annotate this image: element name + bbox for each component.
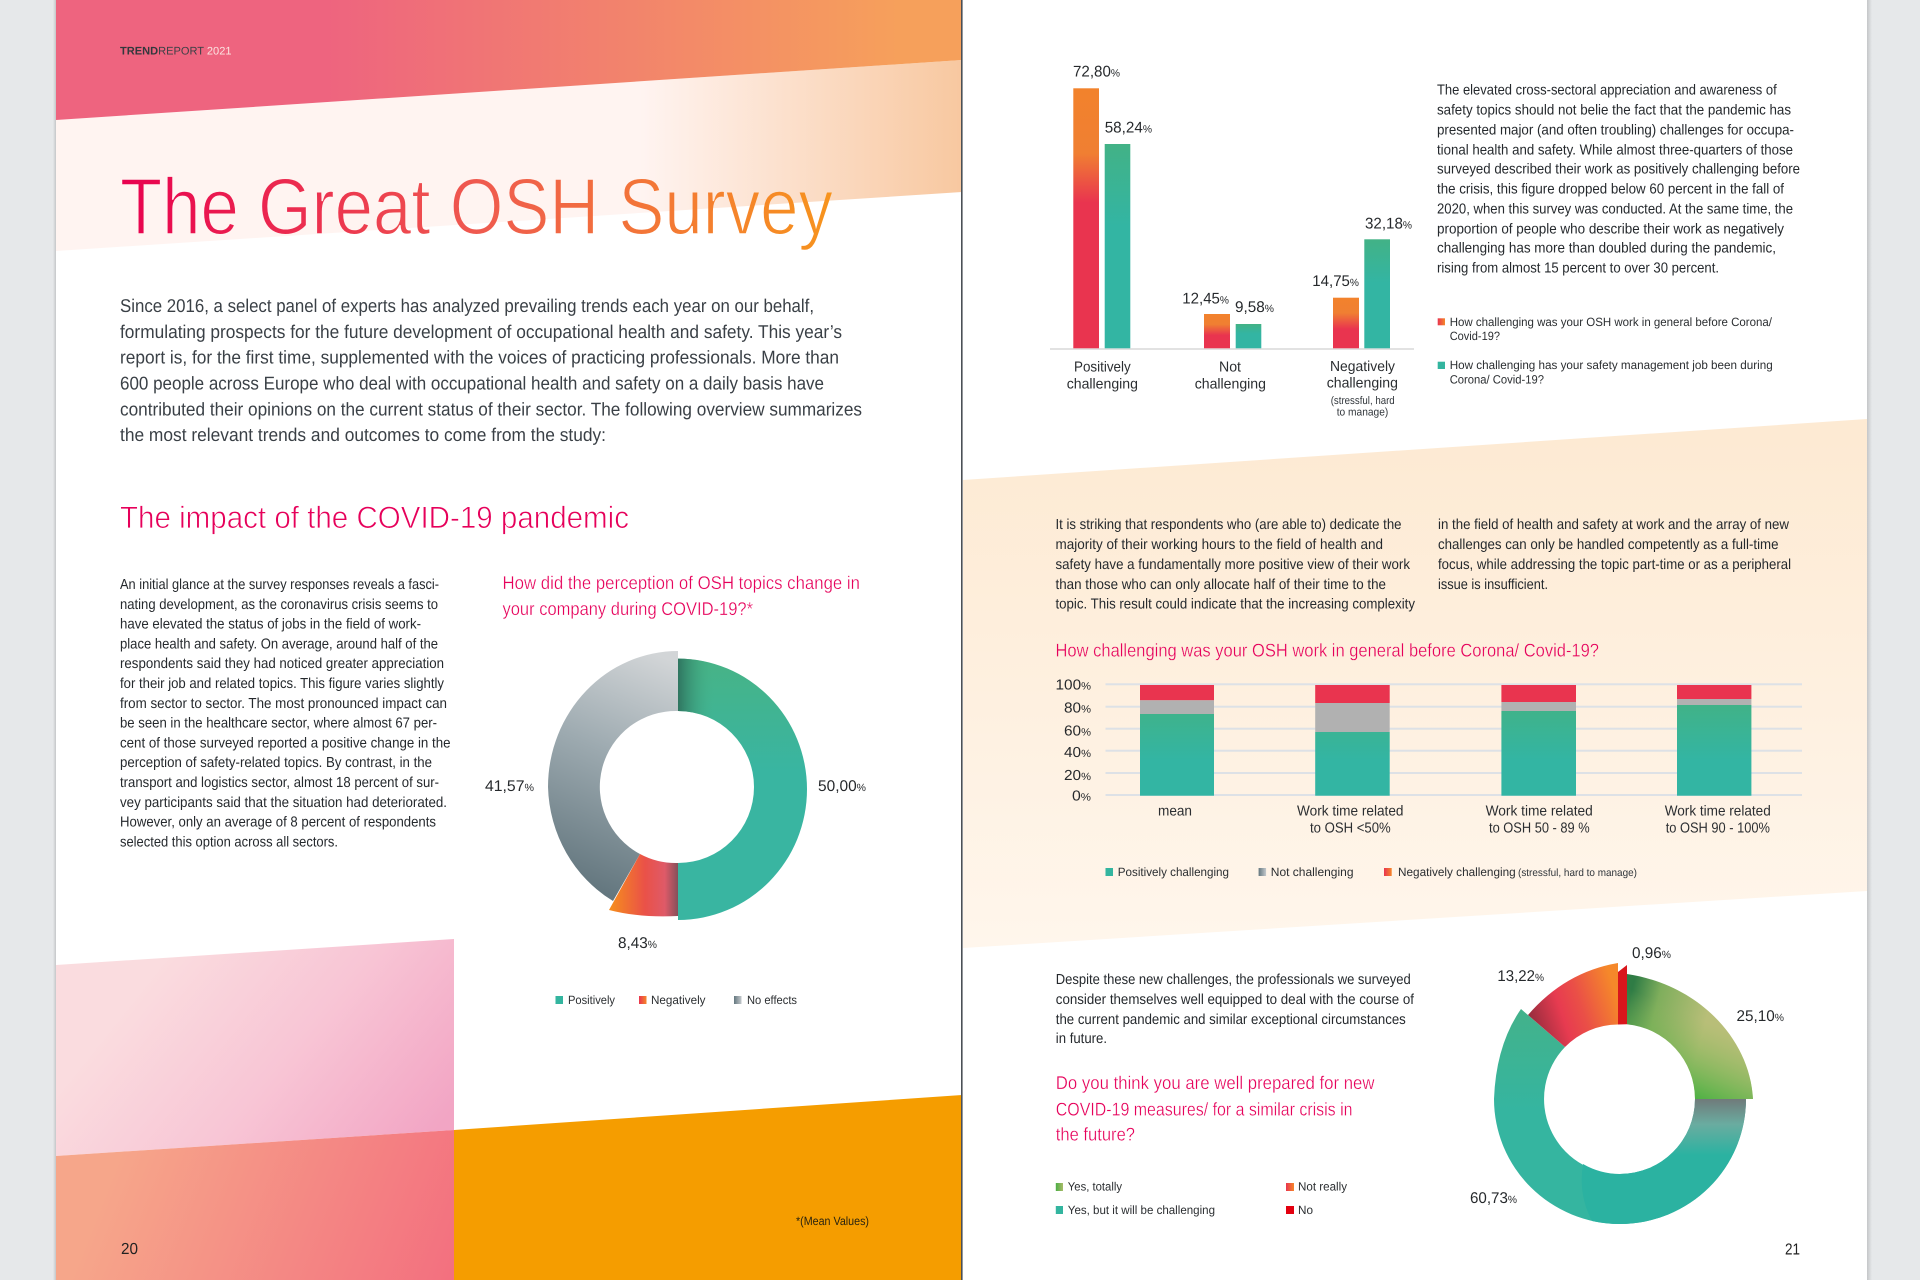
body text column: cent of those surveyed reported a positive change in the [120,735,450,751]
bar values: 72,80% [1073,64,1120,81]
category labels: challenging [1327,376,1398,392]
donut question: Do you think you are well prepared for new [1056,1072,1375,1093]
chart question: your company during COVID-19?* [502,598,753,619]
footnote: *(Mean Values) [796,1214,869,1228]
body text column: An initial glance at the survey responses reveals a fasci- [120,577,439,593]
body text: striking respondents, right column: focus, while addressing the topic part-time or as a peripheral [1438,557,1791,573]
bar chart legend: How challenging has your safety management job been during [1450,358,1773,372]
segment: no 0,96% [1618,965,1627,1024]
x axis labels: Work time related [1665,804,1771,820]
stacked chart question: How challenging was your OSH work in general before Corona/ Covid-19? [1056,640,1599,661]
x axis labels [1158,804,1771,837]
intro paragraph: Since 2016, a select panel of experts has analyzed prevailing trends each year on our behalf, [120,295,814,316]
label 8,43%: 8,43% [618,935,657,952]
section heading: The impact of the COVID-19 pandemic [120,500,629,535]
category labels: Positively [1074,360,1131,376]
stacked chart legend: Positively challenging [1118,865,1229,879]
body text: well equipped: the current pandemic and similar exceptional circumstances [1056,1012,1406,1028]
intro paragraph: formulating prospects for the future development of occupational health and safety. This year’s [120,321,842,342]
donut chart: perception change [485,651,866,952]
header pale band [56,60,962,251]
body text: striking respondents, left column: majority of their working hours to the field of health and [1056,537,1383,553]
stacked chart legend [1106,865,1637,879]
decorative salmon block [56,1130,454,1280]
segment: negatively 8,43% [609,854,678,916]
y axis labels: 0% [1072,788,1091,804]
donut legend: preparedness: Yes, but it will be challenging [1068,1203,1215,1217]
x axis labels: to OSH 50 - 89 % [1489,821,1590,837]
x axis labels: Work time related [1297,804,1404,820]
body text column: for their job and related topics. This figure varies slightly [120,676,445,692]
chart question [502,572,860,619]
donut legend: preparedness: No [1298,1203,1313,1217]
body text column: respondents said they had noticed greater appreciation [120,656,444,672]
bars: positively challenging [1073,88,1130,348]
body text: elevated appreciation: rising from almost 15 percent to over 30 percent. [1437,260,1719,276]
bars: not challenging [1204,314,1261,348]
body text column: from sector to sector. The most pronounced impact can [120,696,447,712]
x axis labels: Work time related [1486,804,1593,820]
y axis labels: 20% [1064,768,1091,784]
segment: no effects 41,57% [548,651,678,901]
bar chart legend: Corona/ Covid-19? [1450,373,1544,387]
body text column: be seen in the healthcare sector, where almost 67 per- [120,716,437,732]
segment: yes but challenging 60,73% [1494,1009,1746,1224]
body text: well equipped: in future. [1056,1031,1107,1047]
stacked chart legend: Not challenging [1271,865,1354,879]
bar values: 58,24% [1105,120,1152,137]
body text: striking respondents, right column: in the field of health and safety at work and the array of new [1438,517,1789,533]
y axis labels [1056,677,1091,804]
body text: elevated appreciation: The elevated cross-sectoral appreciation and awareness of [1437,82,1778,98]
bar chart legend: Covid-19? [1450,329,1500,343]
panel: right page [962,0,1867,1280]
body text: elevated appreciation: presented major (and often troubling) challenges for occupa- [1437,122,1794,138]
intro paragraph: the most relevant trends and outcomes to come from the study: [120,424,606,445]
body text: striking respondents, left column: than those who can only allocate half of their time to the [1056,577,1386,593]
body text column: place health and safety. On average, around half of the [120,636,438,652]
x axis labels: mean [1158,804,1192,820]
bar values: 32,18% [1365,215,1412,232]
body text: elevated appreciation: challenging has more than doubled during the pandemic, [1437,240,1776,256]
bars: negatively challenging [1333,239,1390,348]
stacked bar: 50 to 89% [1501,685,1576,796]
stacked chart legend: (stressful, hard to manage) [1518,867,1637,879]
body text: striking respondents, left column: It is striking that respondents who (are able to) dedicate the [1056,517,1402,533]
decorative pink block [56,939,454,1156]
body text: well equipped: consider themselves well equipped to deal with the course of [1056,992,1415,1008]
y axis labels: 40% [1064,745,1091,761]
y axis labels: 60% [1064,724,1091,740]
body text: elevated appreciation: the crisis, this figure dropped below 60 percent in the fall of [1437,181,1785,197]
stacked bar chart [1056,677,1802,837]
body text: striking respondents, right column: challenges can only be handled competently as a full-time [1438,537,1778,553]
segment: yes totally 25,10% [1627,974,1753,1099]
body text: elevated appreciation: surveyed described their work as positively challenging before [1437,161,1800,177]
bar chart legend: How challenging was your OSH work in general before Corona/ [1450,315,1773,329]
body text: striking respondents, right column: issue is insufficient. [1438,577,1548,593]
label 0,96%: 0,96% [1632,945,1671,962]
donut legend: preparedness: Yes, totally [1068,1180,1122,1194]
bar chart legend [1438,315,1773,387]
category labels [1067,359,1398,419]
donut legend [556,993,797,1007]
body text column: nating development, as the coronavirus crisis seems to [120,597,438,613]
body text: striking respondents, left column: topic. This result could indicate that the increasing complexity [1056,596,1416,612]
panel: left page [56,0,962,1280]
body text: elevated appreciation [1437,82,1800,276]
bar values: 9,58% [1235,299,1274,316]
category labels: (stressful, hard [1331,395,1395,407]
title: The Great OSH Survey [120,162,833,251]
intro paragraph: report is, for the first time, supplemented with the voices of practicing professionals. More than [120,346,839,368]
body text column [120,577,450,850]
body text: elevated appreciation: tional health and safety. While almost three-quarters of those [1437,142,1793,158]
body text: elevated appreciation: 2020, when this survey was conducted. At the same time, the [1437,201,1793,217]
donut legend: Negatively [651,993,706,1007]
page number 20: 20 [121,1241,138,1258]
decorative orange block [454,1095,962,1280]
body text: striking respondents, left column [1056,517,1416,612]
bar chart: challenge before and during Covid [1050,64,1414,419]
body text: elevated appreciation: proportion of people who describe their work as negatively [1437,221,1785,237]
donut question: COVID-19 measures/ for a similar crisis in [1056,1098,1352,1119]
running head: TRENDREPORT 2021 [120,46,232,58]
label 13,22%: 13,22% [1497,968,1544,985]
segment: positively 50,00% [678,659,807,920]
stacked bar: 90 to 100% [1677,685,1751,796]
body text column: vey participants said that the situation had deteriorated. [120,795,447,811]
y axis labels: 80% [1064,701,1091,717]
body text: striking respondents, right column [1438,517,1791,593]
pale orange band [963,419,1867,948]
category labels: challenging [1067,377,1138,393]
category labels: challenging [1195,377,1266,393]
donut legend: No effects [747,993,797,1007]
body text: elevated appreciation: safety topics should not belie the fact that the pandemic has [1437,102,1791,118]
intro paragraph: contributed their opinions on the current status of their sector. The following overview summarizes [120,398,862,420]
x axis labels: to OSH 90 - 100% [1666,821,1770,837]
body text: striking respondents, left column: safety have a fundamentally more positive view of their work [1056,557,1411,573]
category labels: Not [1219,360,1241,376]
label 50,00%: 50,00% [818,778,866,795]
label 41,57%: 41,57% [485,778,534,795]
category labels: Negatively [1330,359,1396,375]
donut question [1056,1072,1375,1145]
header gradient band [56,0,962,120]
donut question: the future? [1056,1124,1135,1145]
stacked bar: mean [1140,685,1214,796]
donut legend: preparedness: Not really [1298,1180,1347,1194]
stacked bar: under 50% [1315,685,1390,796]
body text: well equipped [1056,972,1415,1047]
label 25,10%: 25,10% [1736,1008,1784,1025]
segment: not really 13,22% [1528,963,1618,1047]
body text column: perception of safety-related topics. By contrast, in the [120,755,432,771]
stacked chart legend: Negatively challenging [1398,865,1516,879]
donut legend: Positively [568,993,615,1007]
body text column: selected this option across all sectors. [120,834,338,850]
intro paragraph: 600 people across Europe who deal with occupational health and safety on a daily basis have [120,372,824,394]
page number 21: 21 [1785,1241,1800,1258]
y axis labels: 100% [1056,677,1091,693]
bar values [1073,64,1412,316]
x axis labels: to OSH <50% [1310,821,1391,837]
intro paragraph [120,295,862,445]
body text column: However, only an average of 8 percent of respondents [120,815,436,831]
label 60,73%: 60,73% [1470,1190,1517,1207]
donut legend: preparedness [1056,1180,1347,1217]
body text: well equipped: Despite these new challenges, the professionals we surveyed [1056,972,1411,988]
bar values: 14,75% [1312,273,1359,290]
bar values: 12,45% [1182,290,1229,307]
chart question: How did the perception of OSH topics change in [502,572,860,593]
category labels: to manage) [1337,407,1388,419]
body text column: transport and logistics sector, almost 18 percent of sur- [120,775,439,791]
donut chart: preparedness [1470,945,1784,1224]
body text column: have elevated the status of jobs in the field of work- [120,617,421,633]
